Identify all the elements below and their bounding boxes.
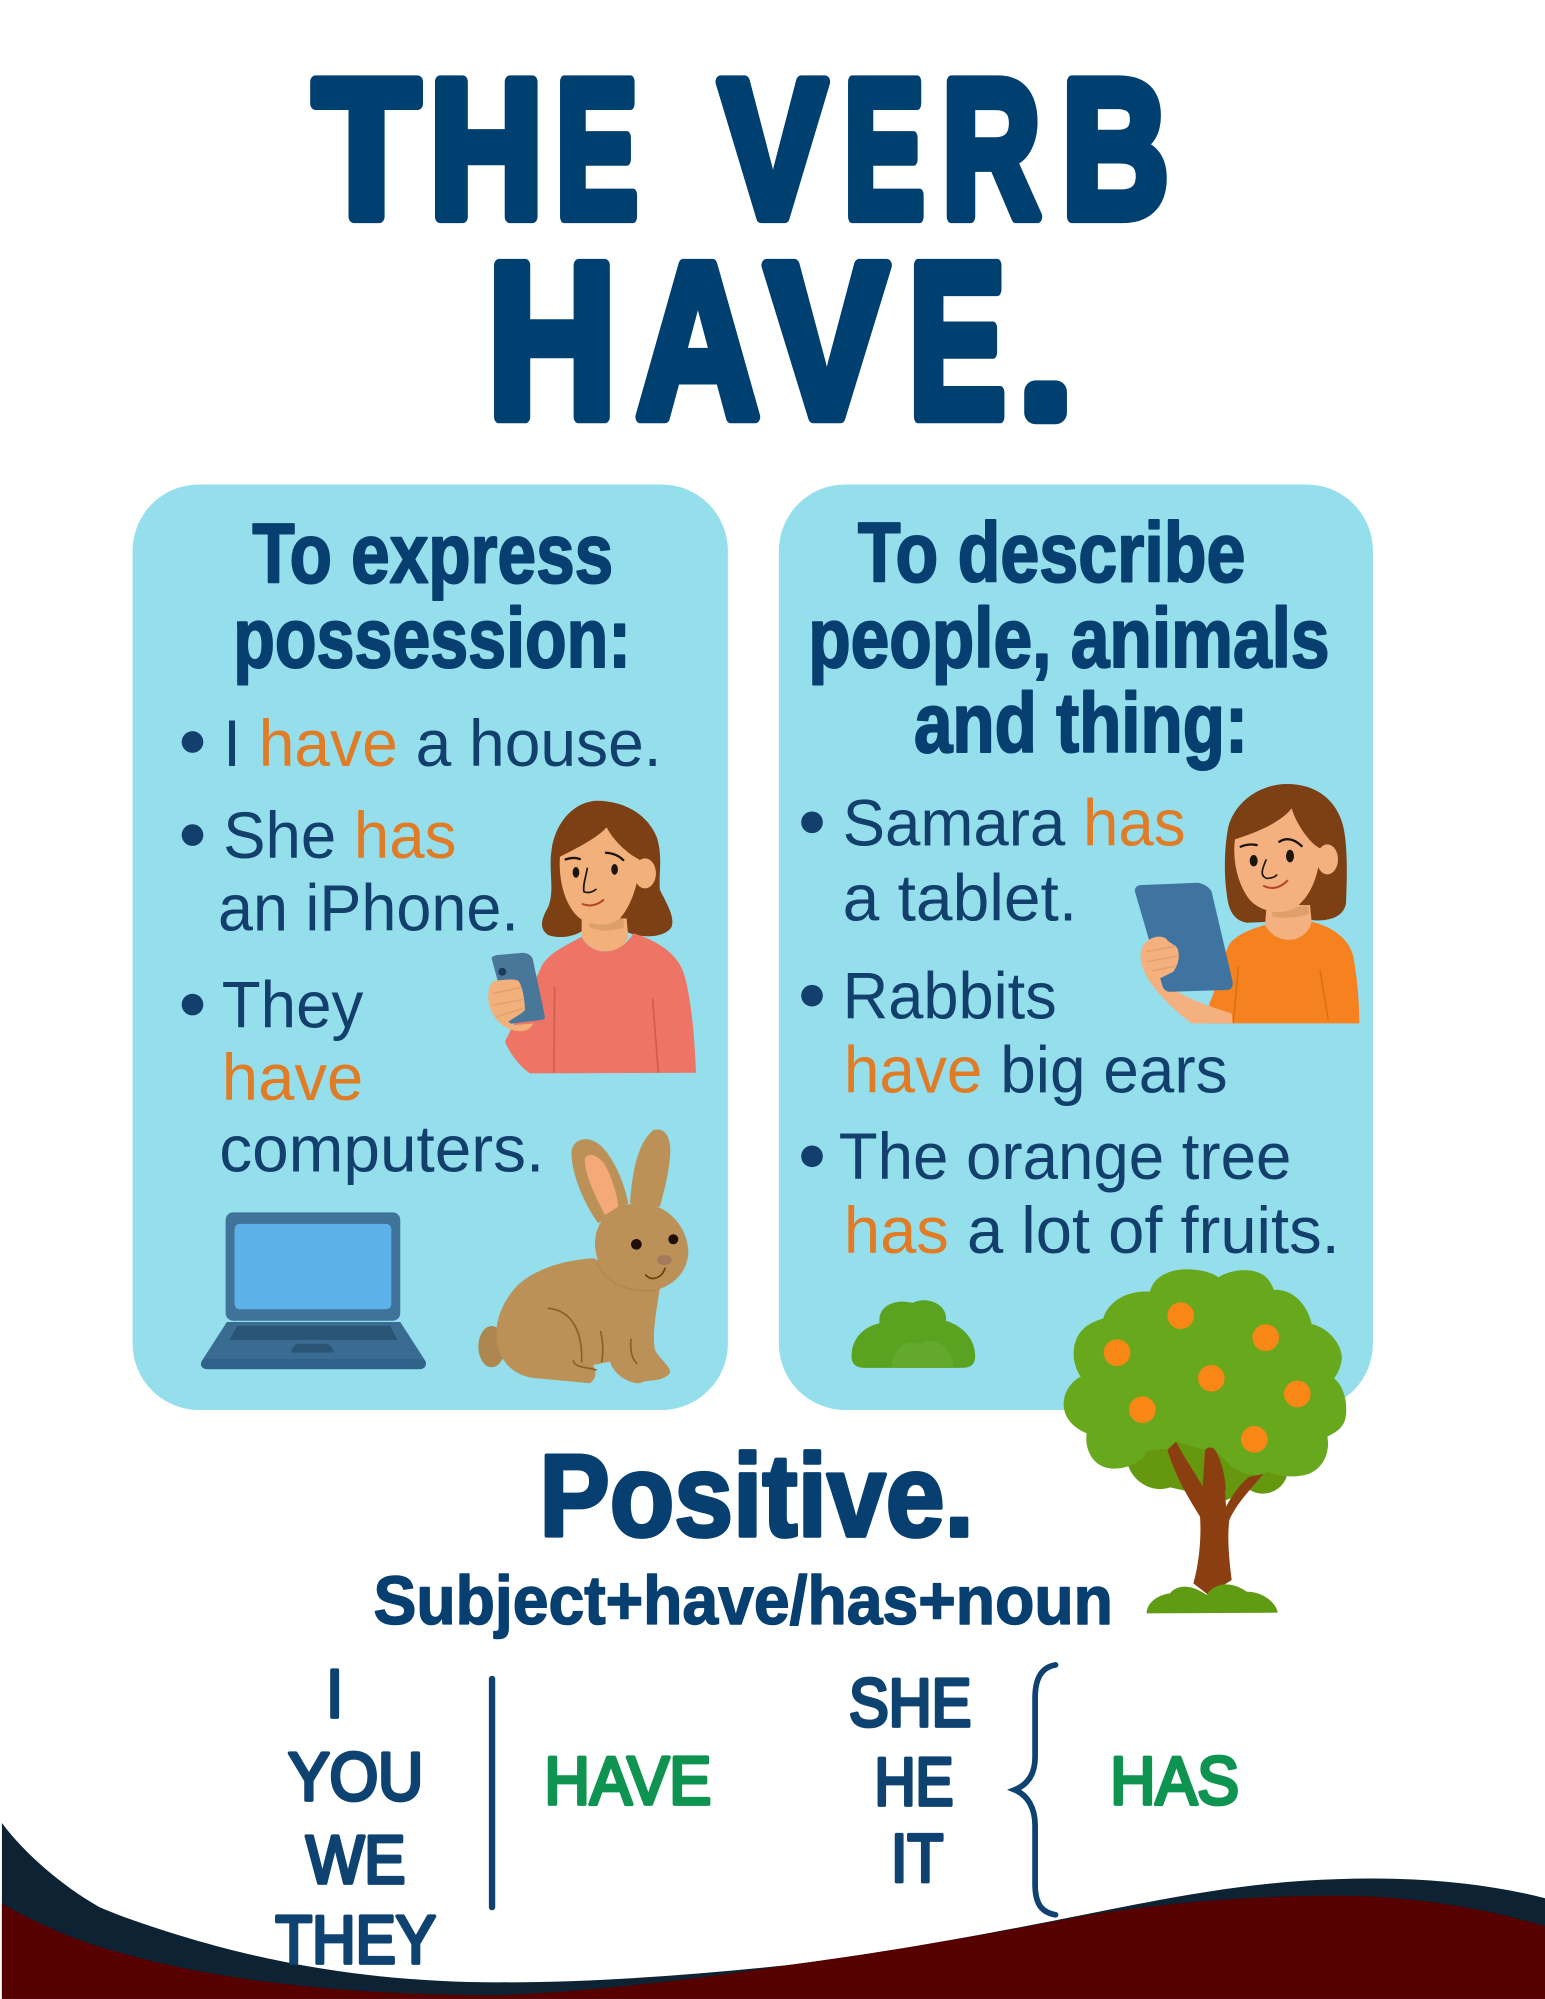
bottom wave decoration: [2, 1823, 1545, 1999]
bullet list: [182, 707, 662, 1187]
tree crown: [1064, 1269, 1346, 1476]
lower foliage: [1127, 1437, 1287, 1500]
pronouns she he it: HE: [874, 1745, 954, 1820]
title line one: H: [430, 39, 543, 259]
formula: Subject+have/has+noun: [374, 1562, 1113, 1639]
bullet list: She has: [223, 799, 456, 873]
icon: girl with phone: [488, 801, 696, 1073]
title line two: V: [765, 217, 888, 464]
bullet list: Samara has: [843, 786, 1186, 860]
title: [314, 39, 1169, 464]
panel heading: possession:: [233, 591, 631, 685]
verb has: HAS: [1110, 1744, 1239, 1819]
bullet list: [801, 786, 1340, 1268]
title line one: V: [720, 39, 826, 259]
bullet list: have: [222, 1041, 363, 1115]
title period: .: [1026, 286, 1065, 443]
icon: rabbit: [478, 1129, 688, 1383]
title line two: H: [487, 217, 617, 464]
tree trunk: [1167, 1442, 1263, 1595]
panel: express possession: [133, 484, 728, 1410]
icon: laptop: [201, 1212, 426, 1369]
pronouns I you we they: I: [326, 1657, 343, 1732]
panel heading: [233, 507, 631, 685]
panel heading: To describe: [858, 505, 1245, 599]
tree oranges: [1104, 1302, 1311, 1453]
title line one: B: [1062, 39, 1169, 259]
bullet list: a tablet.: [843, 861, 1077, 935]
panel heading: To express: [252, 507, 613, 601]
panel background: [133, 484, 728, 1410]
title line two: E: [908, 217, 1006, 464]
bullet list: The orange tree: [839, 1120, 1291, 1194]
icon: orange tree: [1064, 1269, 1346, 1613]
bullet list: has a lot of fruits.: [844, 1194, 1340, 1268]
title line one: R: [942, 39, 1041, 259]
bullet list: Rabbits: [843, 960, 1057, 1034]
pronouns I you we they: YOU: [288, 1740, 423, 1815]
pronouns I you we they: [275, 1657, 436, 1978]
pronouns she he it: [849, 1666, 971, 1897]
panel background: [779, 484, 1373, 1410]
bullet list: I have a house.: [223, 707, 662, 781]
title line one: T: [314, 39, 419, 259]
verb have: HAVE: [544, 1744, 711, 1819]
conjugation table: has: [849, 1665, 1239, 1915]
title line two: A: [636, 217, 760, 464]
bullet list: an iPhone.: [218, 872, 519, 946]
section heading: positive: Positive.: [539, 1430, 974, 1561]
curly brace: [1015, 1665, 1055, 1915]
pronouns she he it: IT: [891, 1822, 943, 1897]
panel heading: people, animals: [808, 591, 1330, 685]
divider line: [490, 1679, 495, 1907]
bullet list: computers.: [219, 1113, 544, 1187]
icon: girl with tablet: [1135, 784, 1359, 1023]
title line one: E: [556, 39, 638, 259]
pronouns I you we they: THEY: [275, 1903, 436, 1978]
panel heading: [808, 505, 1330, 770]
bullet list: have big ears: [844, 1034, 1228, 1108]
panel: describe people, animals and things: [779, 484, 1373, 1613]
tree grass: [1147, 1584, 1278, 1613]
conjugation table: have: [275, 1657, 711, 1978]
bullet list: They: [222, 969, 363, 1043]
title line one: E: [844, 39, 924, 259]
icon: bush: [852, 1300, 975, 1368]
pronouns she he it: SHE: [849, 1666, 971, 1741]
pronouns I you we they: WE: [306, 1823, 405, 1898]
tree trunk tips: [1167, 1442, 1226, 1490]
panel heading: and thing:: [914, 676, 1248, 770]
